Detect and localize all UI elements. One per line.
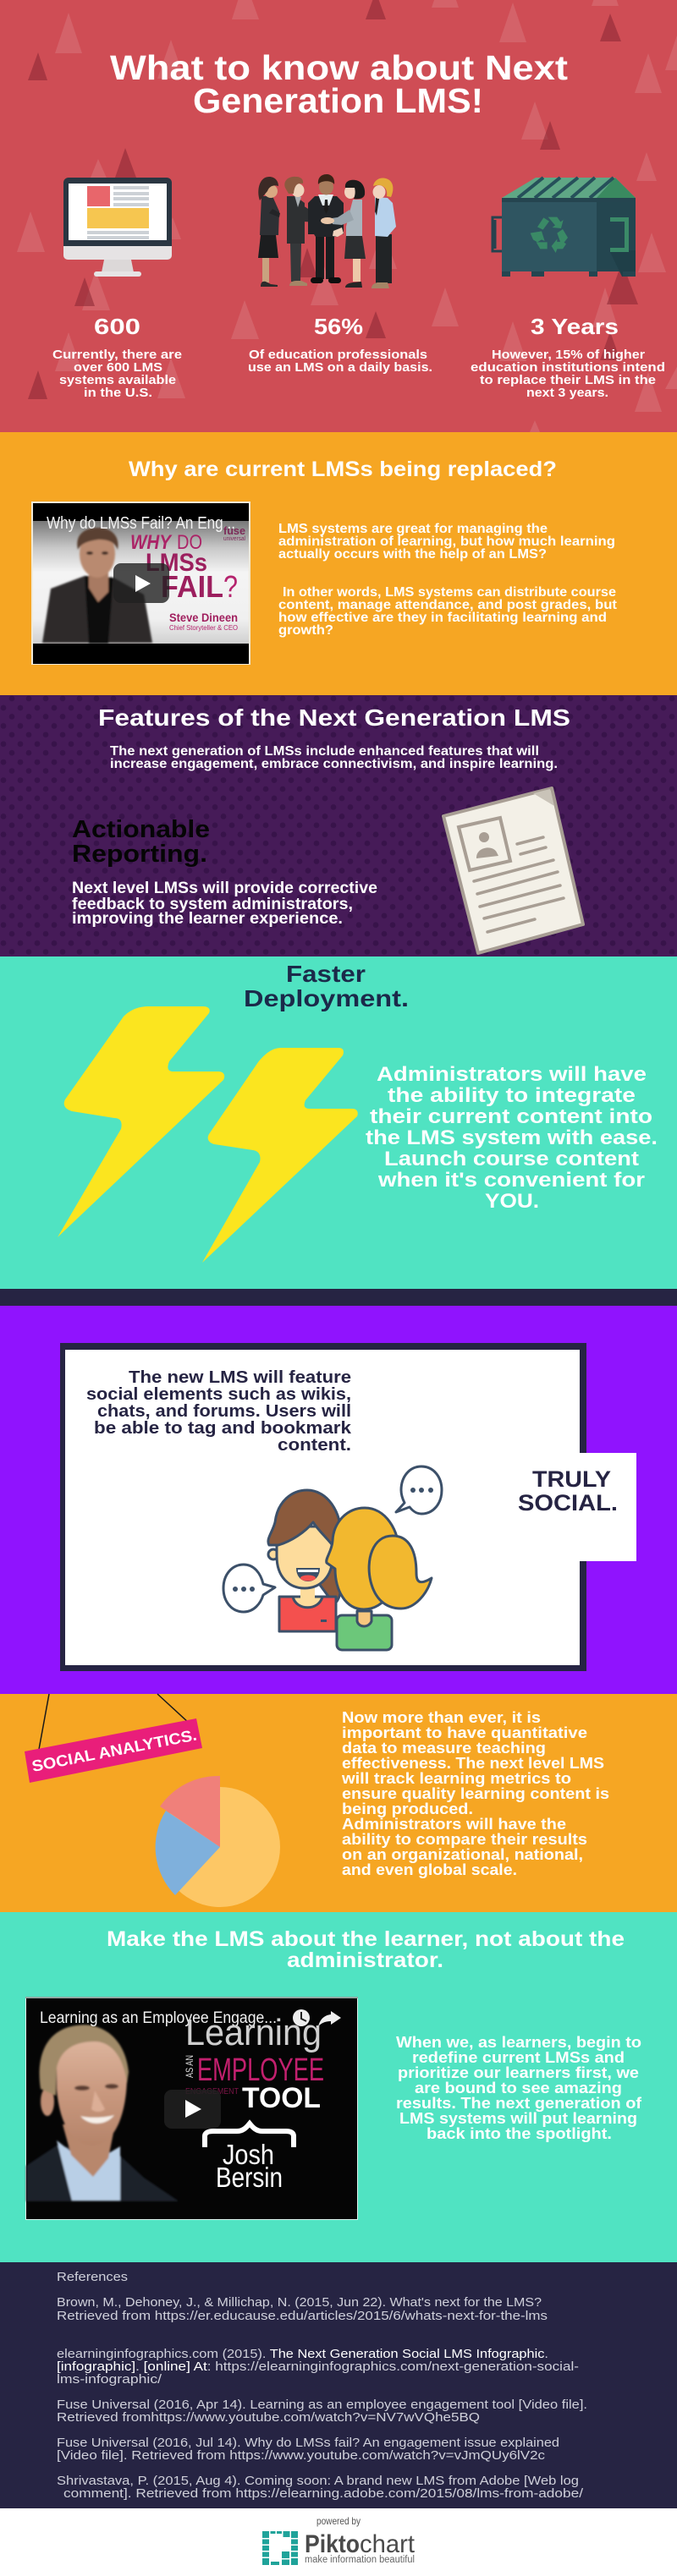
video thumbnail: why do LMSs fail: Steve Dineen (169, 611, 238, 624)
title (110, 48, 568, 120)
footer: Piktochart logo: make information beautiful (305, 2555, 415, 2565)
text: analytics description: and even global scale. (342, 1861, 517, 1878)
video thumbnail: learning as an employee engagement tool: EMPLOYEE (197, 2053, 324, 2088)
stat: 600 LMS systems: 600 (94, 314, 140, 339)
text: social elements: social elements such as wikis, (86, 1385, 351, 1404)
stat: 3 years: However, 15% of higher (492, 348, 645, 362)
panel: references: Retrieved from https://er.educause.edu/articles/2015/6/whats-next-for-the-lms (57, 2310, 548, 2323)
heading: administrator. (287, 1948, 443, 1972)
stat: 3 years (471, 314, 665, 400)
text: deployment description: when it's convenient for (377, 1169, 645, 1192)
video thumbnail: why do LMSs fail: DO (177, 531, 202, 554)
text: features intro (110, 744, 558, 771)
panel: references: Shrivastava, P. (2015, Aug 4). Coming soon: A brand new LMS from Adobe [Web log (57, 2475, 579, 2488)
video thumbnail: learning as an employee engagement tool: ENGAGEMENT (185, 2087, 239, 2096)
stat: 56% of education professionals: 56% (314, 314, 363, 339)
stat: 56% of education professionals: Of education professionals (249, 348, 427, 362)
video thumbnail: why do LMSs fail: WHY (130, 531, 173, 554)
text: analytics description: ensure quality learning content is (342, 1784, 609, 1802)
panel: references: [infographic] . [online] At : https://elearninginfographics.com/next-generation-social- (57, 2360, 579, 2374)
heading: Make the LMS about the learner, not about the (107, 1927, 625, 1951)
text: what LMSs do: administration of learning, but how much learning (278, 534, 615, 549)
text: deployment description: their current content into (370, 1105, 652, 1128)
icon: recycling dumpster (493, 178, 636, 277)
video thumbnail: learning as an employee engagement tool: TOOL (242, 2082, 321, 2114)
heading: Why are current LMSs being replaced? (129, 458, 557, 481)
text: learners first: When we, as learners, begin to (396, 2033, 641, 2051)
text: deployment description: Administrators will have (377, 1063, 647, 1086)
text: features intro: The next generation of LMSs include enhanced features that will (110, 744, 539, 759)
text: learners first (396, 2033, 642, 2142)
panel: header (0, 0, 677, 432)
stat: 600 LMS systems: Currently, there are (52, 348, 182, 362)
panel: social analytics (0, 1694, 677, 1912)
stat: 3 years: next 3 years. (526, 386, 608, 400)
heading (244, 961, 409, 1011)
text: social elements (86, 1368, 352, 1455)
text: what LMSs do: how effective are they in facilitating learning and (278, 611, 607, 625)
text: learners first: prioritize our learners first, we (398, 2064, 639, 2081)
text: actionable reporting: feedback to system administrators, (72, 896, 353, 913)
text: analytics description: being produced. (342, 1800, 473, 1817)
text: actionable reporting (72, 880, 377, 928)
heading: actionable reporting: Reporting. (72, 841, 207, 868)
text: actionable reporting: Next level LMSs will provide corrective (72, 880, 377, 897)
text: analytics description: on an organizational, national, (342, 1845, 583, 1863)
text: what LMSs do: In other words, LMS systems can distribute course (283, 585, 616, 600)
video thumbnail: learning as an employee engagement tool: Bersin (216, 2162, 283, 2193)
text: learners first: are bound to see amazing (415, 2079, 622, 2096)
text: what LMSs do: actually occurs with the help of an LMS? (278, 547, 547, 562)
video thumbnail: why do LMSs fail: LMSs (146, 549, 207, 577)
card (60, 1343, 636, 1671)
footer: Piktochart logo: Pikto (305, 2530, 360, 2558)
text: learners first: results. The next generation of (396, 2094, 642, 2112)
panel: references: Brown, M., Dehoney, J., & Millichap, N. (2015, Jun 22). What's next for the LMS? (57, 2296, 542, 2310)
text: analytics description: Now more than ever, it is (342, 1708, 541, 1726)
footer: Piktochart logo: chart (360, 2530, 416, 2558)
text: analytics description: important to have quantitative (342, 1724, 587, 1741)
heading (107, 1927, 625, 1972)
icon: report document (443, 788, 583, 953)
video thumbnail: learning as an employee engagement tool: Learning as an Employee Engage... (40, 2009, 277, 2027)
text: analytics description: Administrators will have the (342, 1815, 566, 1833)
text: what LMSs do (278, 522, 617, 638)
video thumbnail: learning as an employee engagement tool: Josh (223, 2139, 274, 2170)
video thumbnail: why do LMSs fail (31, 501, 250, 665)
text: social elements: be able to tag and bookmark (94, 1419, 352, 1438)
video thumbnail: why do LMSs fail: FAIL (161, 569, 223, 604)
stat: 3 years: education institutions intend (471, 360, 665, 375)
panel: references: References (57, 2271, 128, 2284)
heading: Deployment. (244, 985, 409, 1011)
pie chart (156, 1776, 280, 1907)
illustration: two women chatting (223, 1466, 442, 1650)
heading: truly social: TRULY (532, 1466, 611, 1492)
video thumbnail: learning as an employee engagement tool (25, 1997, 358, 2220)
heading: Faster (286, 961, 366, 987)
panel: references: comment]. Retrieved from https://elearning.adobe.com/2015/08/lms-from-adobe/ (63, 2487, 584, 2501)
text: deployment description: the LMS system with ease. (366, 1126, 658, 1149)
panel: features of the next generation LMS (0, 695, 677, 956)
text: deployment description: Launch course content (384, 1148, 639, 1170)
footer: Piktochart logo: powered by (316, 2515, 361, 2527)
stat: 600 LMS systems: over 600 LMS (74, 360, 162, 375)
text: social elements: chats, and forums. Users will (97, 1402, 351, 1421)
text: what LMSs do: content, manage attendance, and post grades, but (278, 598, 617, 612)
panel: references (0, 2262, 677, 2508)
text: what LMSs do: LMS systems are great for managing the (278, 522, 548, 536)
heading: actionable reporting: Actionable (72, 816, 210, 843)
title: Generation LMS! (193, 81, 483, 120)
stat: 56% of education professionals (248, 314, 432, 375)
panel: references: elearninginfographics.com (2015). The Next Generation Social LMS Infographic . (57, 2348, 548, 2361)
text: deployment description: YOU. (485, 1190, 539, 1213)
heading: Features of the Next Generation LMS (98, 704, 570, 731)
icon: business people shaking hands (258, 174, 396, 288)
video thumbnail: why do LMSs fail: universal (223, 536, 245, 542)
stat: 56% of education professionals: use an LMS on a daily basis. (248, 360, 432, 375)
icon: lightning bolts (58, 1006, 358, 1263)
video thumbnail: why do LMSs fail: ? (223, 569, 238, 604)
text: social elements: content. (278, 1436, 351, 1455)
panel: why LMSs are being replaced (0, 432, 677, 695)
stat: 600 LMS systems (52, 314, 182, 400)
video thumbnail: why do LMSs fail: Why do LMSs Fail? An Eng... (47, 514, 235, 533)
text: analytics description: effectiveness. The next level LMS (342, 1754, 604, 1772)
stat: 3 years: to replace their LMS in the (480, 373, 656, 387)
panel: make the LMS about the learner (0, 1912, 677, 2262)
text: deployment description (366, 1063, 658, 1213)
sign: social analytics banner (25, 1694, 202, 1783)
video thumbnail: learning as an employee engagement tool: Learning (185, 2012, 322, 2053)
text: actionable reporting: improving the learner experience. (72, 910, 343, 928)
text: features intro: increase engagement, embrace connectivism, and inspire learning. (110, 757, 558, 771)
text: learners first: back into the spotlight. (427, 2124, 612, 2142)
stat: 600 LMS systems: systems available (59, 373, 176, 387)
heading: truly social: SOCIAL. (518, 1490, 618, 1515)
text: learners first: redefine current LMSs and (412, 2048, 625, 2066)
icon: computer monitor (63, 178, 172, 277)
stat: 3 years: 3 Years (531, 314, 619, 339)
text: deployment description: the ability to integrate (388, 1084, 636, 1107)
panel: references: Fuse Universal (2016, Apr 14). Learning as an employee engagement tool [Video file]. (57, 2398, 587, 2412)
video thumbnail: learning as an employee engagement tool: AS AN (184, 2055, 195, 2078)
video thumbnail: why do LMSs fail: Chief Storyteller & CEO (169, 623, 238, 632)
heading: truly social (518, 1466, 618, 1515)
sign: social analytics banner: SOCIAL ANALYTICS. (30, 1726, 198, 1775)
stat: 600 LMS systems: in the U.S. (84, 386, 152, 400)
video thumbnail: why do LMSs fail: fuse (223, 524, 245, 537)
text: what LMSs do: growth? (278, 623, 333, 638)
text: social elements: The new LMS will feature (129, 1368, 351, 1387)
text: analytics description: ability to compare their results (342, 1830, 587, 1848)
text: learners first: LMS systems will put learning (399, 2109, 637, 2127)
panel: references: [Video file]. Retrieved from https://www.youtube.com/watch?v=vJmQUy6lV2c (57, 2449, 545, 2463)
footer: Piktochart logo (0, 2508, 677, 2576)
title: What to know about Next (110, 48, 568, 87)
panel: references: Fuse Universal (2016, Jul 14). Why do LMSs fail? An engagement issue explained (57, 2436, 559, 2450)
panel: references: Retrieved fromhttps://www.youtube.com/watch?v=NV7wVQhe5BQ (57, 2411, 480, 2425)
panel: truly social (0, 1306, 677, 1694)
panel: faster deployment (0, 956, 677, 1289)
text: analytics description: will track learning metrics to (341, 1769, 571, 1787)
text: analytics description: data to measure teaching (342, 1739, 546, 1757)
heading: actionable reporting (72, 816, 210, 868)
text: analytics description (341, 1708, 609, 1878)
panel: references: lms-infographic/ (57, 2373, 162, 2387)
